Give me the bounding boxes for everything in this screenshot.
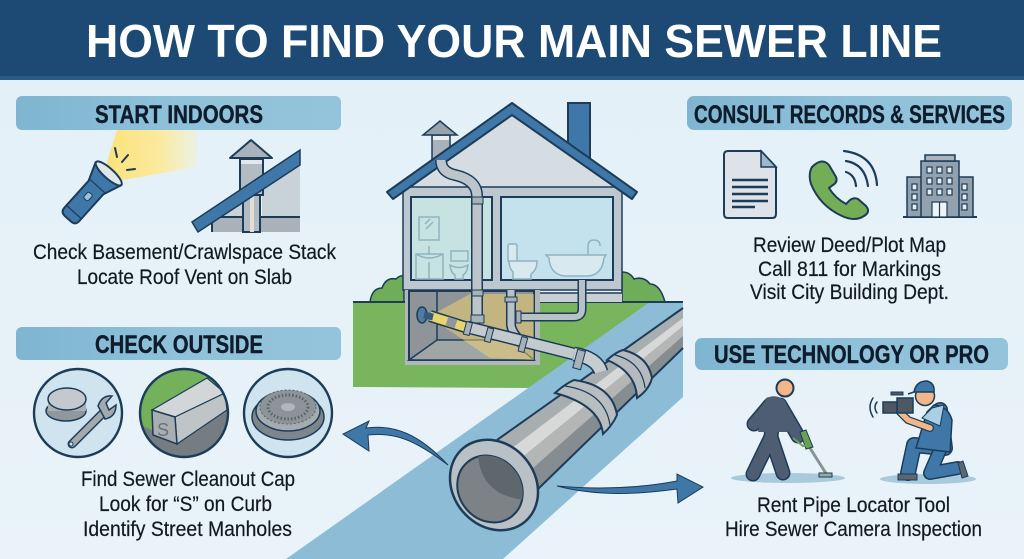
header banner [0, 0, 1024, 80]
heading band: start indoors: START INDOORS [95, 101, 263, 129]
icon: roof vent [192, 140, 300, 232]
central house cross-section [286, 103, 683, 559]
text: consult records [750, 234, 949, 304]
title: HOW TO FIND YOUR MAIN SEWER LINE [86, 15, 942, 67]
icon: phone [810, 151, 877, 219]
text: consult records: Visit City Building Dept. [750, 281, 949, 304]
text: start indoors [33, 241, 336, 289]
text: start indoors: Check Basement/Crawlspace Stack [33, 241, 336, 264]
vent stack pipe [441, 160, 484, 323]
text: use technology: Hire Sewer Camera Inspection [725, 518, 982, 541]
basement [405, 290, 622, 365]
elbow into main [574, 354, 601, 372]
fixtures: toilet and bathtub [508, 240, 606, 279]
cleanout plug [417, 307, 427, 323]
ground: green lawn [353, 302, 650, 388]
roof [387, 103, 637, 199]
icon: document [724, 151, 776, 218]
room: left bathroom [411, 197, 492, 280]
left vent stack [423, 121, 457, 159]
icon: manhole cover [244, 369, 332, 457]
panel: start indoors [16, 96, 341, 289]
room: right bathroom [501, 197, 613, 280]
icon: curb with S mark: S [157, 420, 169, 440]
text: consult records: Review Deed/Plot Map [753, 234, 946, 257]
flashlight beam in basement [437, 294, 534, 360]
secondary drop pipe [511, 290, 522, 342]
panel: use technology or pro [695, 338, 1008, 541]
icon: curb with S mark [138, 368, 230, 458]
bushes [370, 272, 665, 302]
yellow inspection section [430, 316, 465, 327]
text: consult records: Call 811 for Markings [758, 258, 941, 281]
main sewer pipe [448, 307, 684, 532]
fixtures: mirror sink toilet [416, 217, 468, 279]
arrow: to check outside [343, 421, 448, 465]
text: check outside: Find Sewer Cleanout Cap [81, 468, 295, 491]
pipe collars [555, 350, 652, 434]
drain pipes [417, 160, 582, 354]
attic [412, 115, 612, 187]
heading band: check outside [16, 327, 341, 360]
right chimney [568, 103, 590, 165]
arrow: to use technology [557, 474, 703, 503]
icon: flashlight [55, 148, 135, 230]
flashlight beam [106, 130, 197, 180]
text: use technology: Rent Pipe Locator Tool [757, 494, 950, 517]
branch pipe [520, 280, 582, 317]
text: start indoors: Locate Roof Vent on Slab [77, 266, 292, 289]
text: check outside: Identify Street Manholes [83, 518, 292, 541]
icon: cleanout cap and wrench [34, 369, 122, 457]
text: check outside [81, 468, 295, 541]
panel: consult records and services [687, 96, 1012, 304]
heading band: start indoors [16, 96, 341, 130]
pipe mouth [448, 438, 540, 532]
house walls [403, 187, 622, 290]
panel: check outside [16, 327, 341, 541]
icon: city building [903, 155, 977, 217]
icon: person with sewer camera [870, 381, 976, 484]
heading band: check outside: CHECK OUTSIDE [95, 331, 263, 359]
main house drain [467, 327, 574, 354]
ground: blue pipe trench [286, 302, 683, 559]
icon: person with pipe locator [731, 380, 845, 483]
text: use technology [725, 494, 982, 541]
text: check outside: Look for “S” on Curb [99, 493, 272, 516]
